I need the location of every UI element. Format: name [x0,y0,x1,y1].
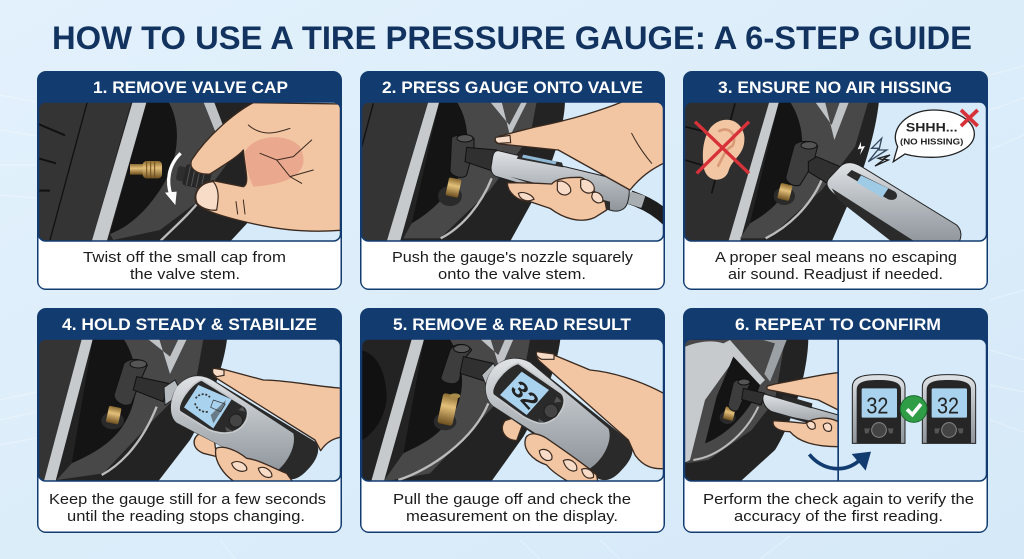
hand [767,373,838,410]
caption: step 3: A proper seal means no escaping [715,249,957,266]
heading: step 1: 1. REMOVE VALVE CAP [93,78,288,97]
panel: step 5 remove and read result [357,308,667,533]
gauge body [827,163,961,243]
icon: air sound lightning [858,138,890,166]
gauge [482,358,633,480]
hand [495,100,667,190]
gauge readout: second [922,375,976,443]
title: HOW TO USE A TIRE PRESSURE GAUGE: A 6-STEP GUIDE [52,20,972,56]
gauge head [441,344,493,384]
fingers [773,418,838,447]
heading: step 4: 4. HOLD STEADY & STABILIZE [62,315,317,334]
panel: step 3 ensure no air hissing [682,71,992,290]
gauge [164,375,318,479]
heading: step 6: 6. REPEAT TO CONFIRM [735,315,941,334]
valve stem and gauge head [438,135,497,206]
icon: green check [900,396,927,422]
caption: step 5: Pull the gauge off and check the [393,491,631,508]
divider [837,337,839,485]
caption: step 5 [393,491,631,525]
caption: step 1 [83,249,286,283]
panel: step 1 remove valve cap [33,71,347,290]
finger behind gauge [194,433,217,457]
speech bubble: shhh, no hissing: (NO HISSING) [900,136,963,146]
fingers [214,446,292,480]
illustration: reading the gauge [357,337,667,485]
caption: step 6 [703,491,974,525]
illustration: gauge pressed on valve [357,100,668,243]
hose [630,197,668,220]
illustration: repeat and compare [682,337,992,485]
gauge [762,394,838,422]
caption: step 4 [49,491,326,525]
reading: 32: 32 [506,376,544,414]
caption: step 4: Keep the gauge still for a few seconds [49,491,326,508]
caption: step 1: Twist off the small cap from [83,249,286,266]
heading: step 5: 5. REMOVE & READ RESULT [393,315,632,334]
panel: step 2 press gauge onto valve [357,71,668,290]
speech bubble: shhh, no hissing [893,110,978,162]
fingers [507,177,607,220]
illustration: removing the valve cap [33,100,347,243]
caption: step 3 [715,249,957,283]
gauge readout: second: 32 [937,392,959,418]
valve stem [130,161,162,178]
finger behind gauge [502,418,522,442]
arrow: repeat [809,452,871,471]
caption: step 2: Push the gauge's nozzle squarely [392,249,634,266]
illustration: no hissing [682,100,992,243]
fingers [525,434,598,485]
gauge readout: first [852,375,905,443]
gauge readout: first: 32 [866,392,888,418]
valve and gauge head [101,359,168,429]
caption: step 2: onto the valve stem. [438,266,586,283]
caption: step 6: Perform the check again to verify the [703,491,974,508]
caption: step 4: until the reading stops changing. [67,508,305,525]
loose valve stem [434,393,460,430]
speech bubble: shhh, no hissing: SHHH... [906,120,957,134]
panel: step 6 repeat to confirm [682,308,992,533]
valve and gauge head [720,379,765,424]
caption: step 1: the valve stem. [130,266,240,283]
gauge body [491,151,629,211]
icon: crossed-out ear [695,120,749,180]
caption: step 6: accuracy of the first reading. [734,508,943,525]
illustration: holding gauge steady [33,337,347,485]
valve cap [176,164,212,188]
caption: step 5: measurement on the display. [406,508,618,525]
caption: step 3: air sound. Readjust if needed. [728,266,943,283]
panel: step 4 hold steady and stabilize [33,308,347,533]
heading: step 3: 3. ENSURE NO AIR HISSING [718,78,952,97]
hand [537,352,667,469]
hand [213,368,343,451]
arrow: twist direction [165,153,181,205]
hand [191,103,344,231]
heading: step 2: 2. PRESS GAUGE ONTO VALVE [382,78,643,97]
valve and gauge head [774,141,840,205]
caption: step 2 [392,249,634,283]
